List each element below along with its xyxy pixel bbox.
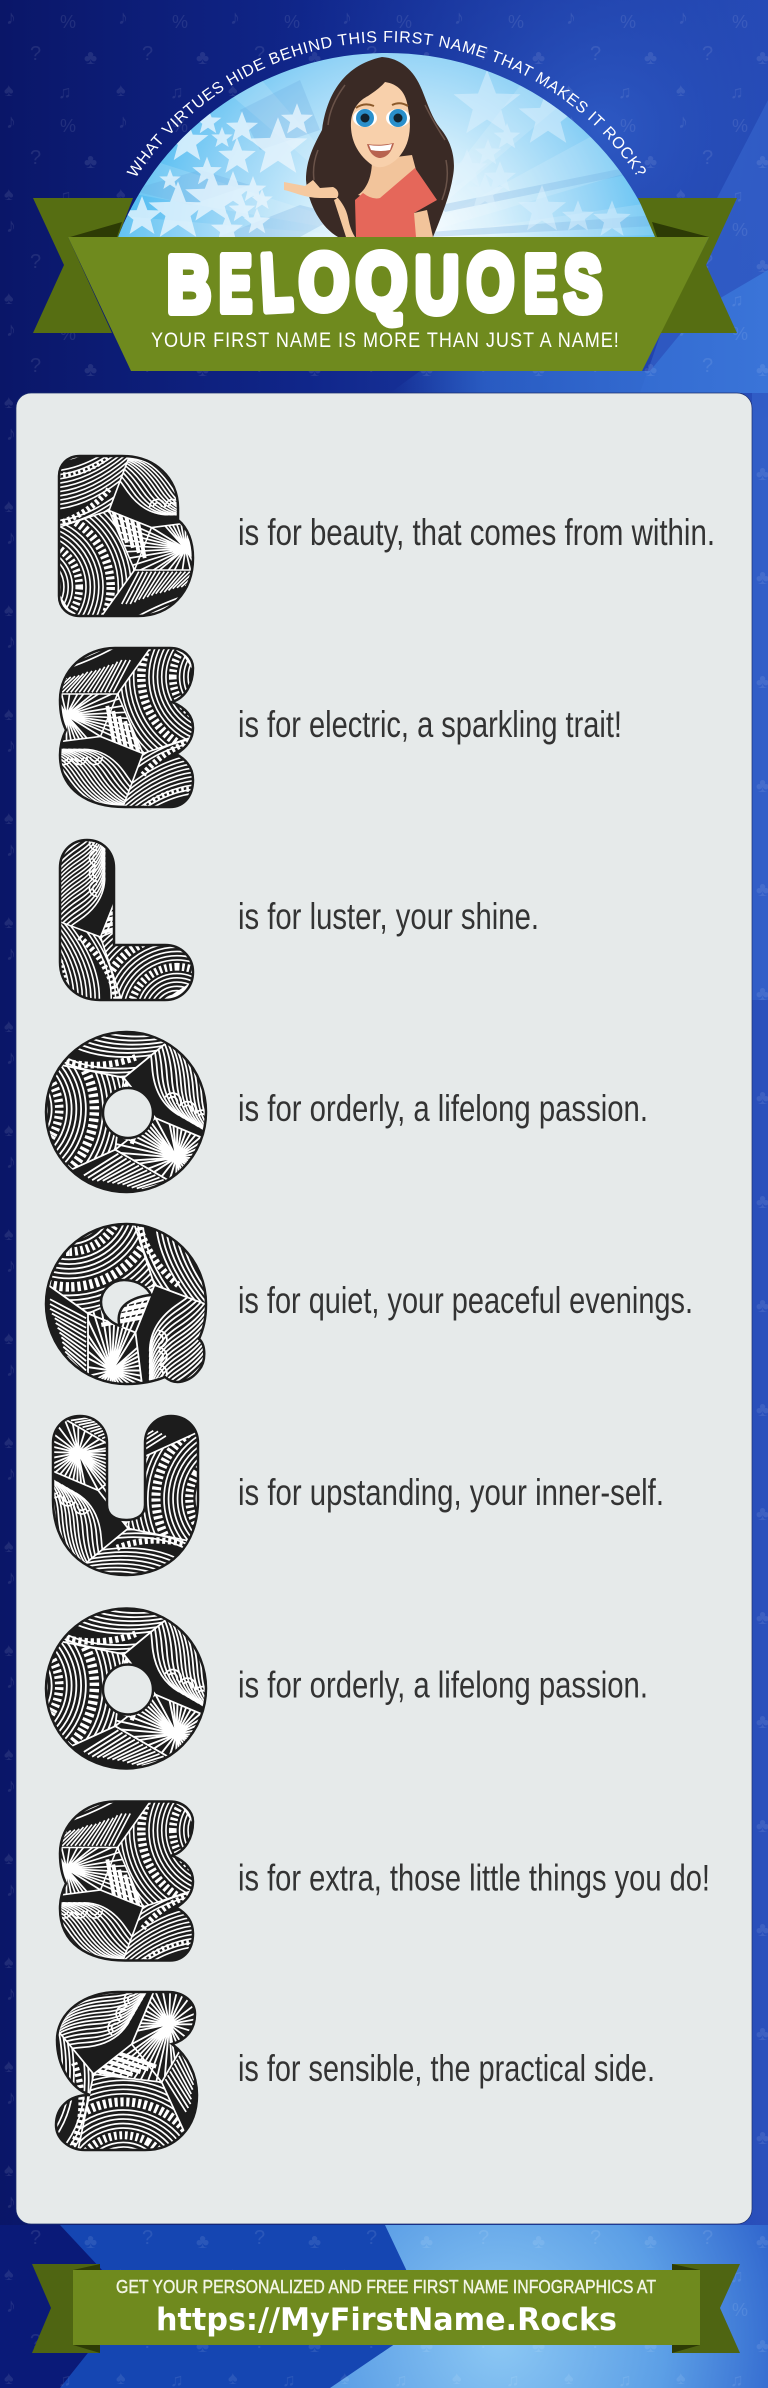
main band [68, 237, 709, 371]
mouth [367, 143, 394, 158]
arm [414, 210, 433, 237]
row: letter L [58, 838, 536, 1002]
name title: E [219, 239, 252, 328]
dome with sunburst and stars [110, 50, 670, 244]
row: letter O (second) [44, 1607, 646, 1770]
name title [167, 237, 602, 329]
subtitle: YOUR FIRST NAME IS MORE THAN JUST A NAME! [151, 329, 619, 352]
row: letter L: is for luster, your shine. [238, 896, 539, 937]
row: letter E (second) [58, 1800, 708, 1962]
left tail [33, 198, 133, 333]
character illustration [284, 57, 454, 237]
name title: E [524, 239, 557, 328]
name title: Q [356, 237, 407, 326]
row: letter U [52, 1414, 662, 1576]
row: letter O (second): is for orderly, a lifelong passion. [238, 1664, 648, 1706]
row: letter U: is for upstanding, your inner-self. [238, 1472, 664, 1513]
row: letter E [58, 646, 620, 808]
left fold [70, 222, 122, 237]
arc tagline: WHAT VIRTUES HIDE BEHIND THIS FIRST NAME THAT MAKES IT ROCK? [126, 31, 646, 176]
footer bottom-left fold [73, 2345, 100, 2353]
name title: L [259, 237, 294, 328]
row: letter S [54, 1990, 652, 2152]
row: letter B [58, 454, 712, 618]
hair [306, 57, 454, 237]
footer top-right fold [672, 2264, 700, 2270]
row: letter E: is for electric, a sparkling trait! [238, 704, 622, 745]
right fold [652, 222, 709, 237]
eyebrows [356, 103, 408, 108]
name title: O [299, 237, 349, 326]
name title: B [167, 240, 211, 329]
footer left tail [32, 2264, 100, 2353]
hair highlights [314, 85, 447, 200]
main panel [16, 393, 752, 2224]
footer right tail [672, 2264, 740, 2353]
footer ribbon [32, 2264, 740, 2353]
row: letter Q [44, 1222, 690, 1386]
footer call to action: GET YOUR PERSONALIZED AND FREE FIRST NAME INFOGRAPHICS AT [116, 2277, 656, 2297]
eyes [353, 109, 410, 127]
right tail [638, 198, 737, 333]
row: letter O [44, 1030, 646, 1194]
footer url: https://MyFirstName.Rocks [156, 2302, 617, 2338]
name title: O [467, 237, 514, 326]
row: letter O: is for orderly, a lifelong passion. [238, 1088, 648, 1129]
footer band [73, 2270, 700, 2345]
footer bottom-right fold [672, 2345, 700, 2353]
footer top-left fold [73, 2264, 100, 2270]
neck and chest [358, 155, 416, 200]
name title: S [564, 239, 602, 328]
shirt [355, 168, 437, 237]
header ribbon [33, 198, 737, 371]
name title: U [415, 240, 459, 329]
hand [284, 180, 355, 237]
face [351, 82, 410, 167]
row: letter S: is for sensible, the practical side. [238, 2048, 655, 2089]
